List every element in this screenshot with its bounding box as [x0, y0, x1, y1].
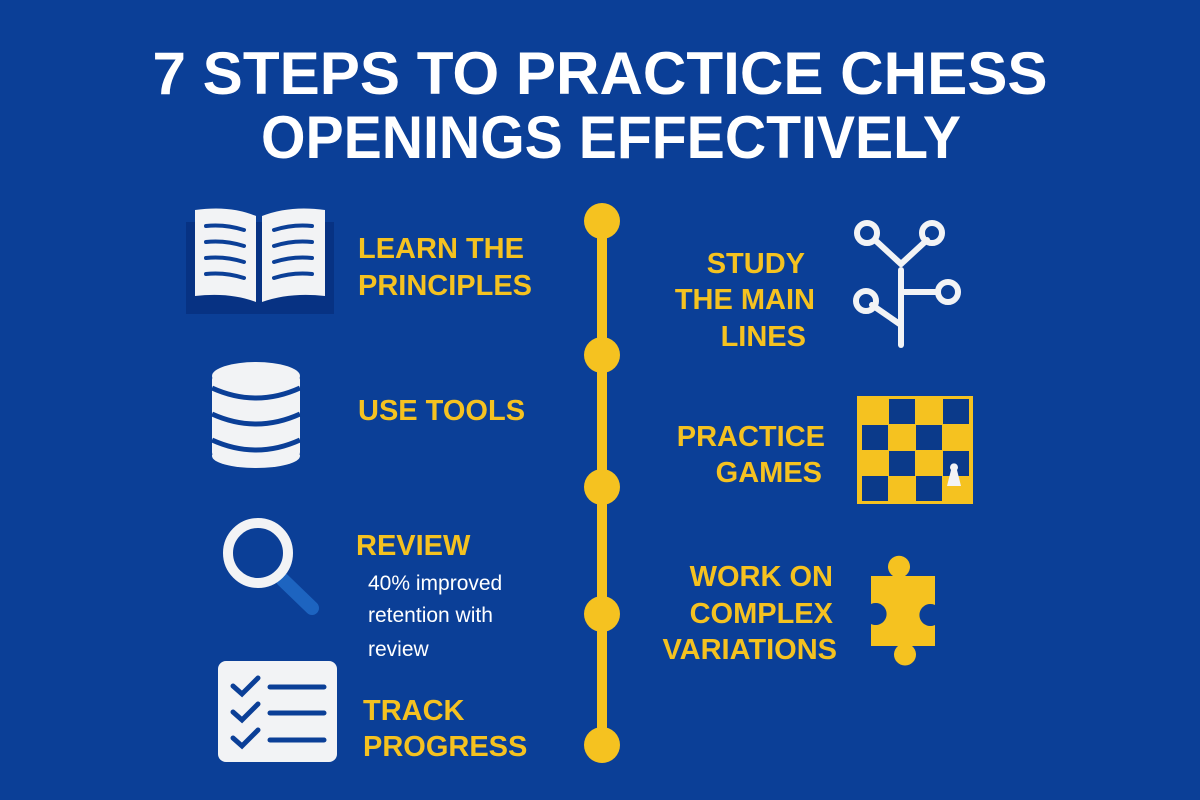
- title: [152, 40, 1048, 171]
- text: learn the principles: PRINCIPLES: [358, 270, 532, 302]
- title: OPENINGS EFFECTIVELY: [261, 104, 961, 171]
- text: practice games: [677, 421, 825, 489]
- text: work on complex variations: VARIATIONS: [662, 634, 837, 666]
- icon: book: [186, 208, 334, 314]
- icon: tree: [856, 223, 958, 345]
- text: study the main lines: THE MAIN: [675, 284, 815, 316]
- text: review: retention with: [368, 604, 493, 627]
- text: review: REVIEW: [356, 530, 471, 562]
- text: review: 40% improved: [368, 572, 502, 595]
- text: study the main lines: [675, 248, 815, 353]
- text: track progress: PROGRESS: [363, 731, 527, 763]
- text: review: [356, 530, 502, 661]
- text: study the main lines: LINES: [721, 321, 806, 353]
- text: use tools: USE TOOLS: [358, 395, 525, 427]
- timeline: [584, 203, 620, 763]
- text: track progress: TRACK: [363, 695, 465, 727]
- text: track progress: [363, 695, 527, 763]
- icon: checklist: [218, 661, 337, 762]
- icon: puzzle: [871, 556, 935, 665]
- text: study the main lines: STUDY: [707, 248, 805, 280]
- title: 7 STEPS TO PRACTICE CHESS: [152, 40, 1048, 107]
- text: work on complex variations: [662, 561, 837, 666]
- icon: chess board: [857, 396, 973, 504]
- icon: database: [212, 362, 300, 468]
- icon: magnifier: [228, 523, 312, 608]
- text: practice games: PRACTICE: [677, 421, 825, 453]
- text: learn the principles: [358, 233, 532, 302]
- text: learn the principles: LEARN THE: [358, 233, 524, 265]
- text: practice games: GAMES: [716, 457, 822, 489]
- text: work on complex variations: COMPLEX: [690, 598, 834, 630]
- text: work on complex variations: WORK ON: [690, 561, 833, 593]
- text: review: review: [368, 638, 430, 661]
